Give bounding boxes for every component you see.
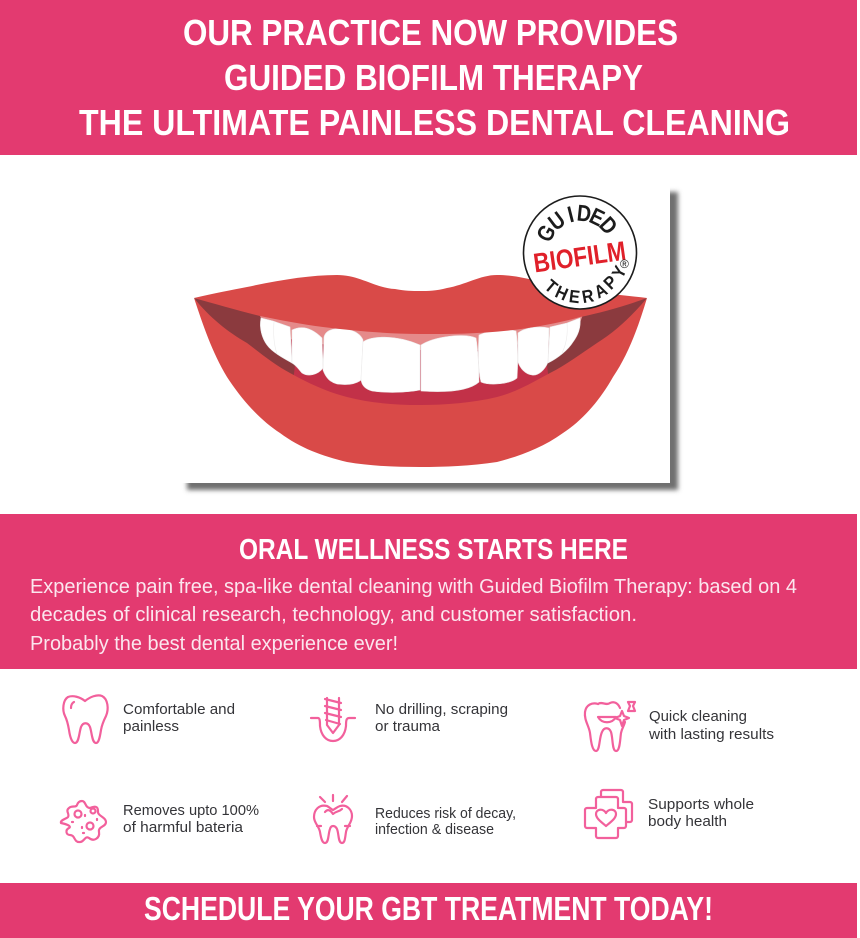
benefit: reduces risk: Reduces risk of decay,	[375, 805, 516, 822]
title	[79, 12, 790, 143]
title: THE ULTIMATE PAINLESS DENTAL CLEANING	[79, 102, 790, 143]
heading: ORAL WELLNESS STARTS HERE	[239, 534, 628, 566]
benefit: whole body health	[648, 796, 754, 830]
benefit: no drilling	[375, 701, 508, 735]
benefit: comfortable	[123, 701, 235, 735]
upper lip	[194, 275, 647, 334]
icon: bacteria	[61, 801, 106, 842]
benefit: quick cleaning	[648, 708, 774, 743]
badge: Guided Biofilm Therapy: BIOFILM	[532, 236, 628, 278]
benefit: reduces risk: infection & disease	[375, 821, 494, 838]
icon: drill	[311, 698, 355, 741]
icon: medical cross with heart	[585, 790, 632, 838]
benefit: comfortable: Comfortable and	[123, 701, 235, 718]
panel: smile image	[0, 155, 678, 490]
icon: smiling tooth with sparkles	[585, 702, 635, 751]
benefit: removes bacteria	[123, 802, 259, 836]
benefit: whole body health: Supports whole	[648, 796, 754, 813]
badge: Guided Biofilm Therapy: P	[600, 272, 621, 293]
badge: Guided Biofilm Therapy	[524, 196, 636, 309]
body text: Experience pain free, spa-like dental cleaning with Guided Biofilm Therapy: based on 4	[30, 576, 797, 598]
body text: Probably the best dental experience ever!	[30, 633, 398, 655]
benefit: reduces risk	[375, 805, 516, 838]
badge: Guided Biofilm Therapy: D	[576, 200, 592, 227]
badge: Guided Biofilm Therapy: A	[591, 279, 611, 303]
title: OUR PRACTICE NOW PROVIDES	[183, 12, 678, 53]
panel: oral wellness	[0, 514, 857, 669]
badge: Guided Biofilm Therapy: E	[568, 286, 581, 307]
badge: Guided Biofilm Therapy: G	[531, 220, 561, 246]
benefit: whole body health: body health	[648, 813, 727, 830]
icon: tooth	[63, 695, 108, 743]
body text: decades of clinical research, technology, and customer satisfaction.	[30, 604, 637, 626]
badge: Guided Biofilm Therapy: E	[585, 203, 608, 232]
badge: Guided Biofilm Therapy: H	[552, 282, 571, 305]
badge: Guided Biofilm Therapy: ®	[620, 257, 629, 271]
benefit: quick cleaning: Quick cleaning	[649, 708, 747, 725]
header band	[0, 0, 857, 155]
teeth	[260, 318, 580, 392]
benefit: no drilling: No drilling, scraping	[375, 701, 508, 718]
badge: Guided Biofilm Therapy: D	[594, 212, 622, 240]
benefit: no drilling: or trauma	[375, 718, 441, 735]
benefit: comfortable: painless	[123, 718, 179, 735]
badge: Guided Biofilm Therapy: T	[541, 276, 562, 298]
benefit: quick cleaning: with lasting results	[648, 726, 774, 743]
badge: Guided Biofilm Therapy: I	[565, 201, 576, 228]
icon: tooth with decay	[314, 795, 352, 843]
benefit: removes bacteria: of harmful bateria	[123, 819, 244, 836]
mouth interior	[194, 298, 647, 412]
footer band	[0, 883, 857, 938]
badge: Guided Biofilm Therapy: R	[580, 286, 595, 307]
lower lip	[194, 298, 647, 467]
badge: Guided Biofilm Therapy: U	[543, 207, 570, 236]
call to action: SCHEDULE YOUR GBT TREATMENT TODAY!	[144, 890, 713, 927]
benefit: removes bacteria: Removes upto 100%	[123, 802, 259, 819]
badge: Guided Biofilm Therapy: Y	[608, 262, 631, 281]
title: GUIDED BIOFILM THERAPY	[224, 57, 643, 98]
body text	[30, 576, 797, 655]
